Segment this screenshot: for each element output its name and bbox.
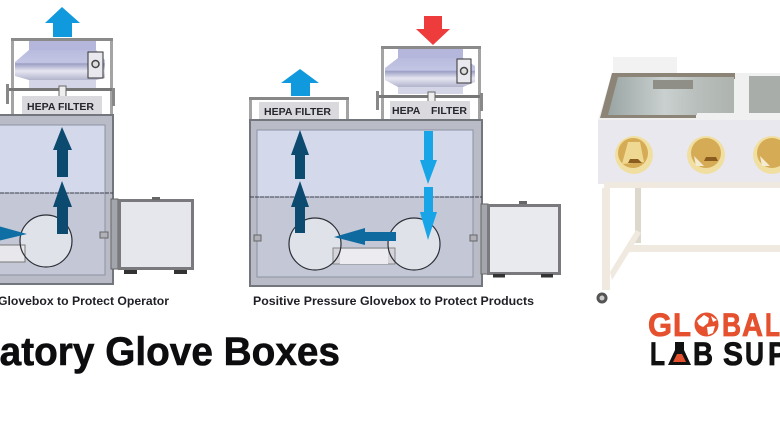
window frame	[598, 73, 780, 120]
logo word: LAB SUPPLY: U	[745, 336, 764, 372]
HEPA housing: HEPA FILTER	[264, 106, 331, 118]
logo word: GLOBAL	[648, 307, 780, 343]
HEPA housing	[249, 97, 349, 121]
HEPA filter left: HEPA FILTER	[27, 101, 94, 113]
caption: Positive Pressure Glovebox to Protect Products	[253, 296, 534, 308]
right window glass	[749, 76, 780, 113]
stand	[602, 182, 780, 290]
icon: exhaust arrow up	[281, 69, 319, 96]
logo word: GLOBAL: G	[648, 307, 672, 343]
fan housing frame	[6, 38, 115, 116]
HEPA filter right: HEPA	[392, 105, 421, 117]
side pass box	[481, 201, 560, 278]
panel: positive pressure glovebox diagram	[249, 16, 560, 308]
left side window	[600, 73, 735, 118]
logo: Global Lab Supply	[648, 307, 780, 372]
side pass box	[111, 197, 192, 274]
chamber	[0, 115, 113, 284]
icon: flask	[668, 342, 691, 365]
airflow arrows	[0, 127, 72, 241]
logo word: LAB SUPPLY	[650, 336, 780, 372]
logo word: LAB SUPPLY: B	[693, 336, 713, 372]
logo word: GLOBAL: B	[722, 307, 741, 343]
panel: negative pressure glovebox diagram	[0, 7, 192, 308]
icon: exhaust arrow up	[45, 7, 80, 37]
logo word: LAB SUPPLY: L	[650, 336, 665, 372]
caster	[596, 292, 608, 304]
port two	[687, 136, 725, 174]
icon: globe	[694, 312, 718, 336]
cabinet body	[598, 120, 780, 184]
icon: intake arrow down	[416, 16, 450, 45]
logo word: GLOBAL: A	[742, 307, 763, 343]
chamber	[250, 120, 482, 286]
window reflection strip	[653, 80, 693, 89]
HEPA filter right	[390, 101, 470, 120]
port three	[753, 136, 780, 174]
logo word: GLOBAL: L	[673, 307, 691, 343]
HEPA filter left	[22, 96, 102, 115]
back panel	[613, 57, 677, 74]
glove ports	[615, 136, 780, 174]
airflow arrows	[291, 130, 437, 245]
main window glass	[608, 77, 734, 115]
port one	[615, 136, 653, 174]
fan housing frame	[376, 46, 483, 120]
logo word: LAB SUPPLY: S	[723, 336, 743, 372]
HEPA filter right: FILTER	[431, 105, 467, 117]
panel: glove box photo	[596, 57, 780, 304]
